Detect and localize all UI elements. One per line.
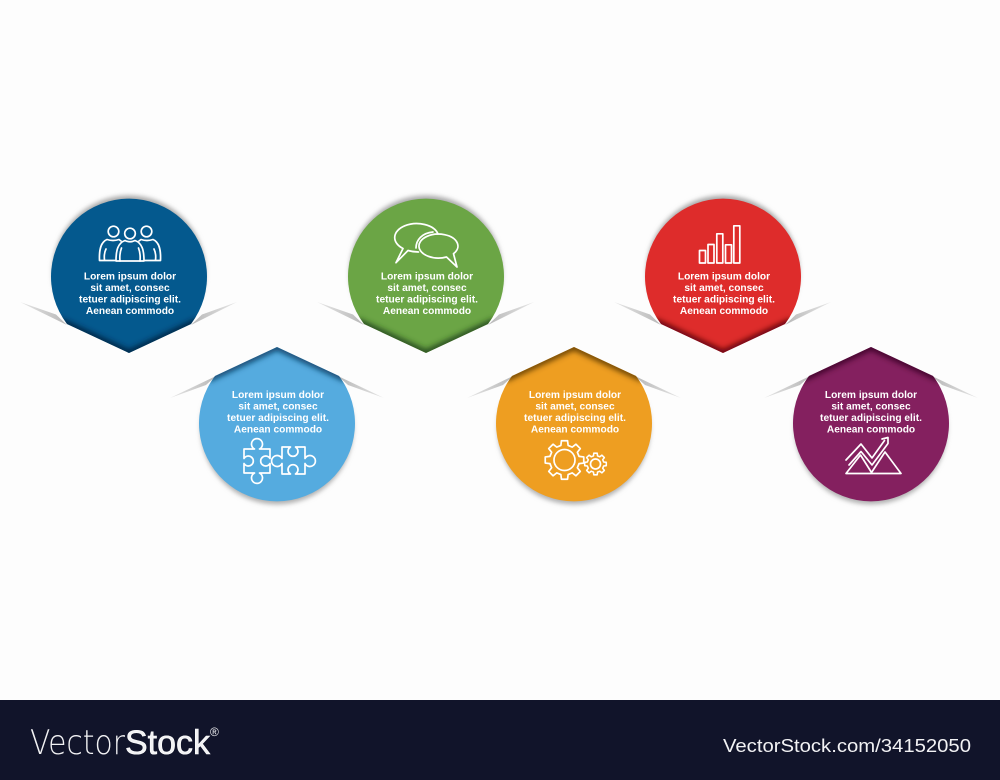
text: step 5: Aenean commodo bbox=[680, 306, 768, 317]
text: step 3: Aenean commodo bbox=[383, 306, 471, 317]
text: step 5: sit amet, consec bbox=[684, 283, 764, 294]
footer bar bbox=[0, 700, 1000, 780]
text: step 1: tetuer adipiscing elit. bbox=[79, 294, 181, 305]
text: step 4: sit amet, consec bbox=[535, 402, 615, 412]
logo: VectorStock: Vector bbox=[30, 723, 125, 763]
text: step 4: tetuer adipiscing elit. bbox=[524, 413, 626, 424]
text: step 5: tetuer adipiscing elit. bbox=[673, 294, 775, 305]
panel: step 6 mountains (purple) bbox=[764, 347, 978, 504]
text: step 4: Lorem ipsum dolor bbox=[529, 390, 621, 401]
panel: step 5 bar chart (red) bbox=[614, 196, 831, 353]
logo: VectorStock: Stock bbox=[125, 724, 211, 762]
text: step 6: tetuer adipiscing elit. bbox=[820, 413, 922, 424]
panel: step 4 gears (orange) bbox=[467, 347, 681, 504]
panel: step 2 puzzle (light blue) bbox=[170, 347, 384, 504]
text: step 6: Lorem ipsum dolor bbox=[825, 390, 917, 401]
source url text: VectorStock.com/34152050 bbox=[723, 735, 971, 756]
text: step 2: Aenean commodo bbox=[234, 424, 322, 436]
icon: speech bubbles bbox=[395, 224, 458, 267]
text: step 6: Aenean commodo bbox=[827, 424, 915, 436]
text: step 1: sit amet, consec bbox=[90, 283, 170, 294]
text: step 1: Aenean commodo bbox=[86, 306, 174, 317]
text: step 3: Lorem ipsum dolor bbox=[381, 271, 473, 282]
icon: people bbox=[99, 226, 161, 261]
text: step 5: Lorem ipsum dolor bbox=[678, 271, 770, 282]
text: step 2: tetuer adipiscing elit. bbox=[227, 413, 329, 424]
text: step 2: Lorem ipsum dolor bbox=[232, 390, 324, 401]
text: step 4: Aenean commodo bbox=[531, 424, 619, 436]
icon: mountains with arrow bbox=[846, 438, 901, 474]
text: step 3: sit amet, consec bbox=[387, 283, 467, 294]
panel: step 1 people (blue) bbox=[20, 196, 237, 353]
icon: gears bbox=[545, 441, 606, 479]
icon: bar chart bbox=[700, 226, 740, 263]
panel: step 3 speech bubbles (green) bbox=[317, 196, 534, 353]
text: step 1: Lorem ipsum dolor bbox=[84, 271, 176, 282]
logo: VectorStock: ® bbox=[210, 725, 219, 739]
icon: puzzle pieces bbox=[244, 439, 315, 483]
text: step 3: tetuer adipiscing elit. bbox=[376, 294, 478, 305]
text: step 2: sit amet, consec bbox=[238, 402, 318, 412]
text: step 6: sit amet, consec bbox=[831, 402, 911, 412]
